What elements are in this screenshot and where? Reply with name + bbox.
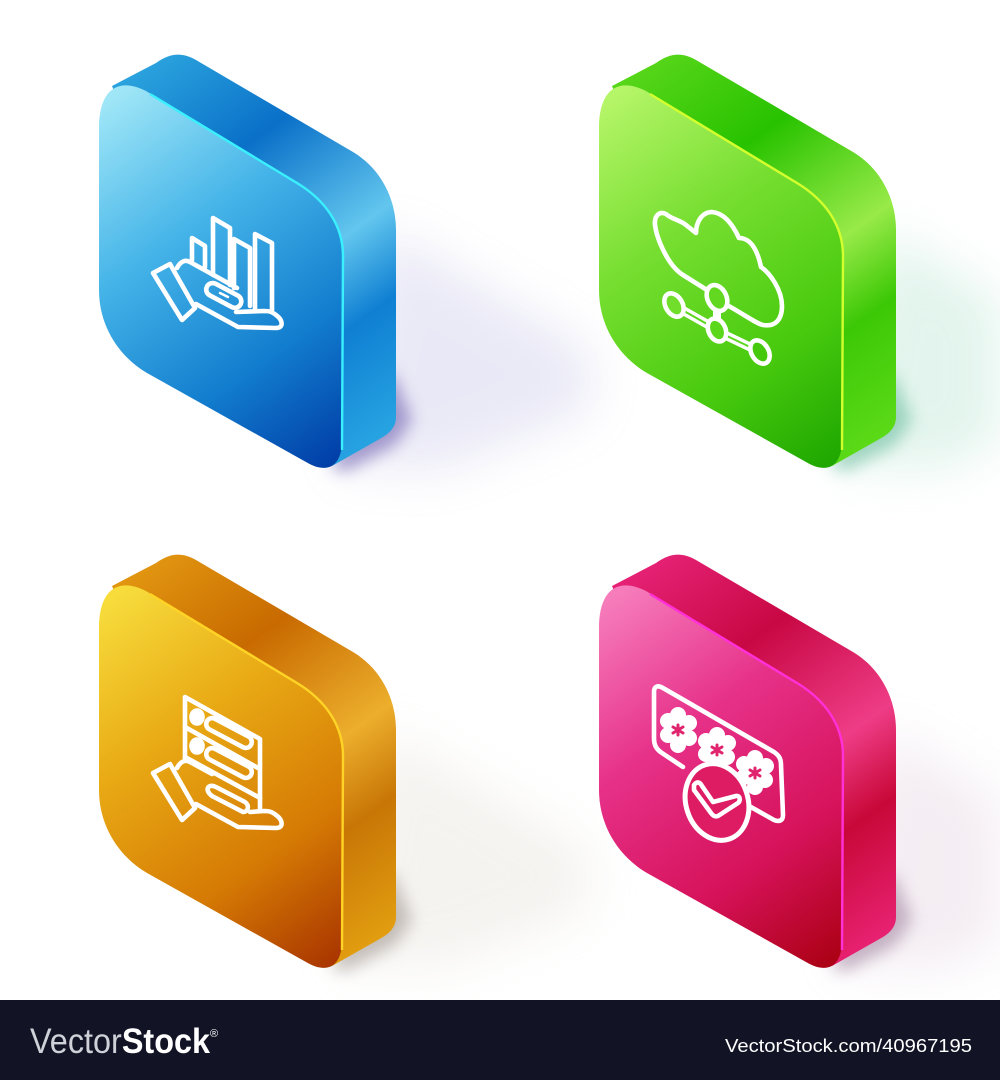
- logo: VectorStock: VectorStock: [30, 1022, 210, 1061]
- icon: hand holding bar chart: [153, 218, 282, 328]
- check mark: [694, 782, 740, 816]
- icon: cloud network: [655, 212, 782, 367]
- highlight edge: [650, 594, 843, 950]
- icon: password with check mark: [654, 686, 783, 849]
- shadow: pink button: [830, 730, 1000, 972]
- footer bar: [0, 1000, 1000, 1080]
- shadow: blue button: [330, 230, 590, 472]
- shadow: green button: [830, 230, 1000, 472]
- highlight edge: [150, 94, 343, 450]
- side of green button: [612, 55, 896, 466]
- flower centres: [673, 725, 760, 778]
- side of blue button: [112, 55, 396, 466]
- shadow: orange button: [330, 730, 590, 972]
- image id: VectorStock.com/40967195: [725, 1036, 972, 1056]
- front of pink button: [599, 585, 843, 968]
- panel: green isometric button: [599, 55, 1000, 472]
- password field: [654, 686, 783, 821]
- front of green button: [599, 85, 843, 468]
- front of blue button: [99, 85, 343, 468]
- check badge: [675, 755, 759, 849]
- highlight edge: [150, 594, 343, 950]
- panel: blue isometric button: [99, 55, 590, 472]
- highlight edge: [650, 94, 843, 450]
- front of orange button: [99, 585, 343, 968]
- flower asterisks: [660, 707, 774, 795]
- side of orange button: [112, 555, 396, 966]
- registered mark: ®: [210, 1028, 218, 1040]
- panel: orange isometric button: [99, 555, 590, 972]
- side of pink button: [612, 555, 896, 966]
- icon: hand holding server: [153, 697, 282, 828]
- panel: pink isometric button: [599, 555, 1000, 972]
